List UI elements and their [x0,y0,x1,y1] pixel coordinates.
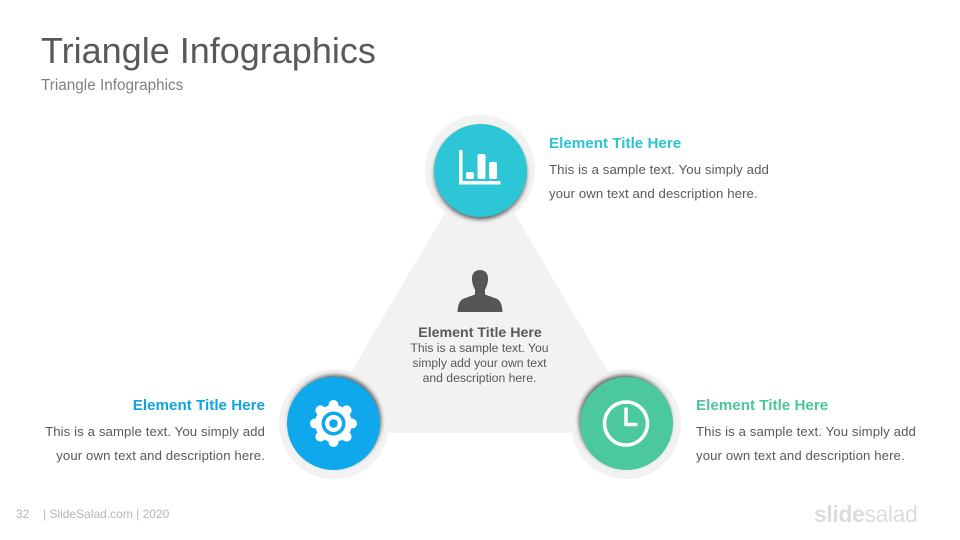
node: right clock [571,369,681,479]
subtitle: Triangle Infographics [41,77,183,94]
text: right element: This is a sample text. You simply add [696,424,916,439]
icon: person [458,270,502,312]
heading: centre element: Element Title Here [418,325,542,341]
icon: gear [310,400,357,447]
heading: top element: Element Title Here [549,135,681,152]
node: top chart [425,115,535,225]
text: left element: This is a sample text. You simply add [45,424,265,439]
footer: | SlideSalad.com | 2020 [43,507,169,521]
page number: 32 [16,507,29,521]
central triangle [315,154,644,433]
icon: bar chart [459,150,500,184]
heading: left element: Element Title Here [133,397,265,414]
text: right element [696,424,916,463]
heading: right element: Element Title Here [696,397,828,414]
text: centre element: simply add your own text [412,356,547,370]
logo: slidesalad [814,501,917,527]
node: left gear [279,369,389,479]
text: left element: your own text and description here. [56,448,265,463]
text: top element: This is a sample text. You simply add [549,162,769,177]
text: left element [45,424,265,463]
text: right element: your own text and description here. [696,448,905,463]
text: centre element [410,341,549,385]
icon: clock [604,402,648,445]
text: top element [549,162,769,201]
text: centre element: and description here. [423,371,536,385]
text: top element: your own text and description here. [549,186,758,201]
text: centre element: This is a sample text. You [410,341,549,355]
title: Triangle Infographics [41,30,376,71]
